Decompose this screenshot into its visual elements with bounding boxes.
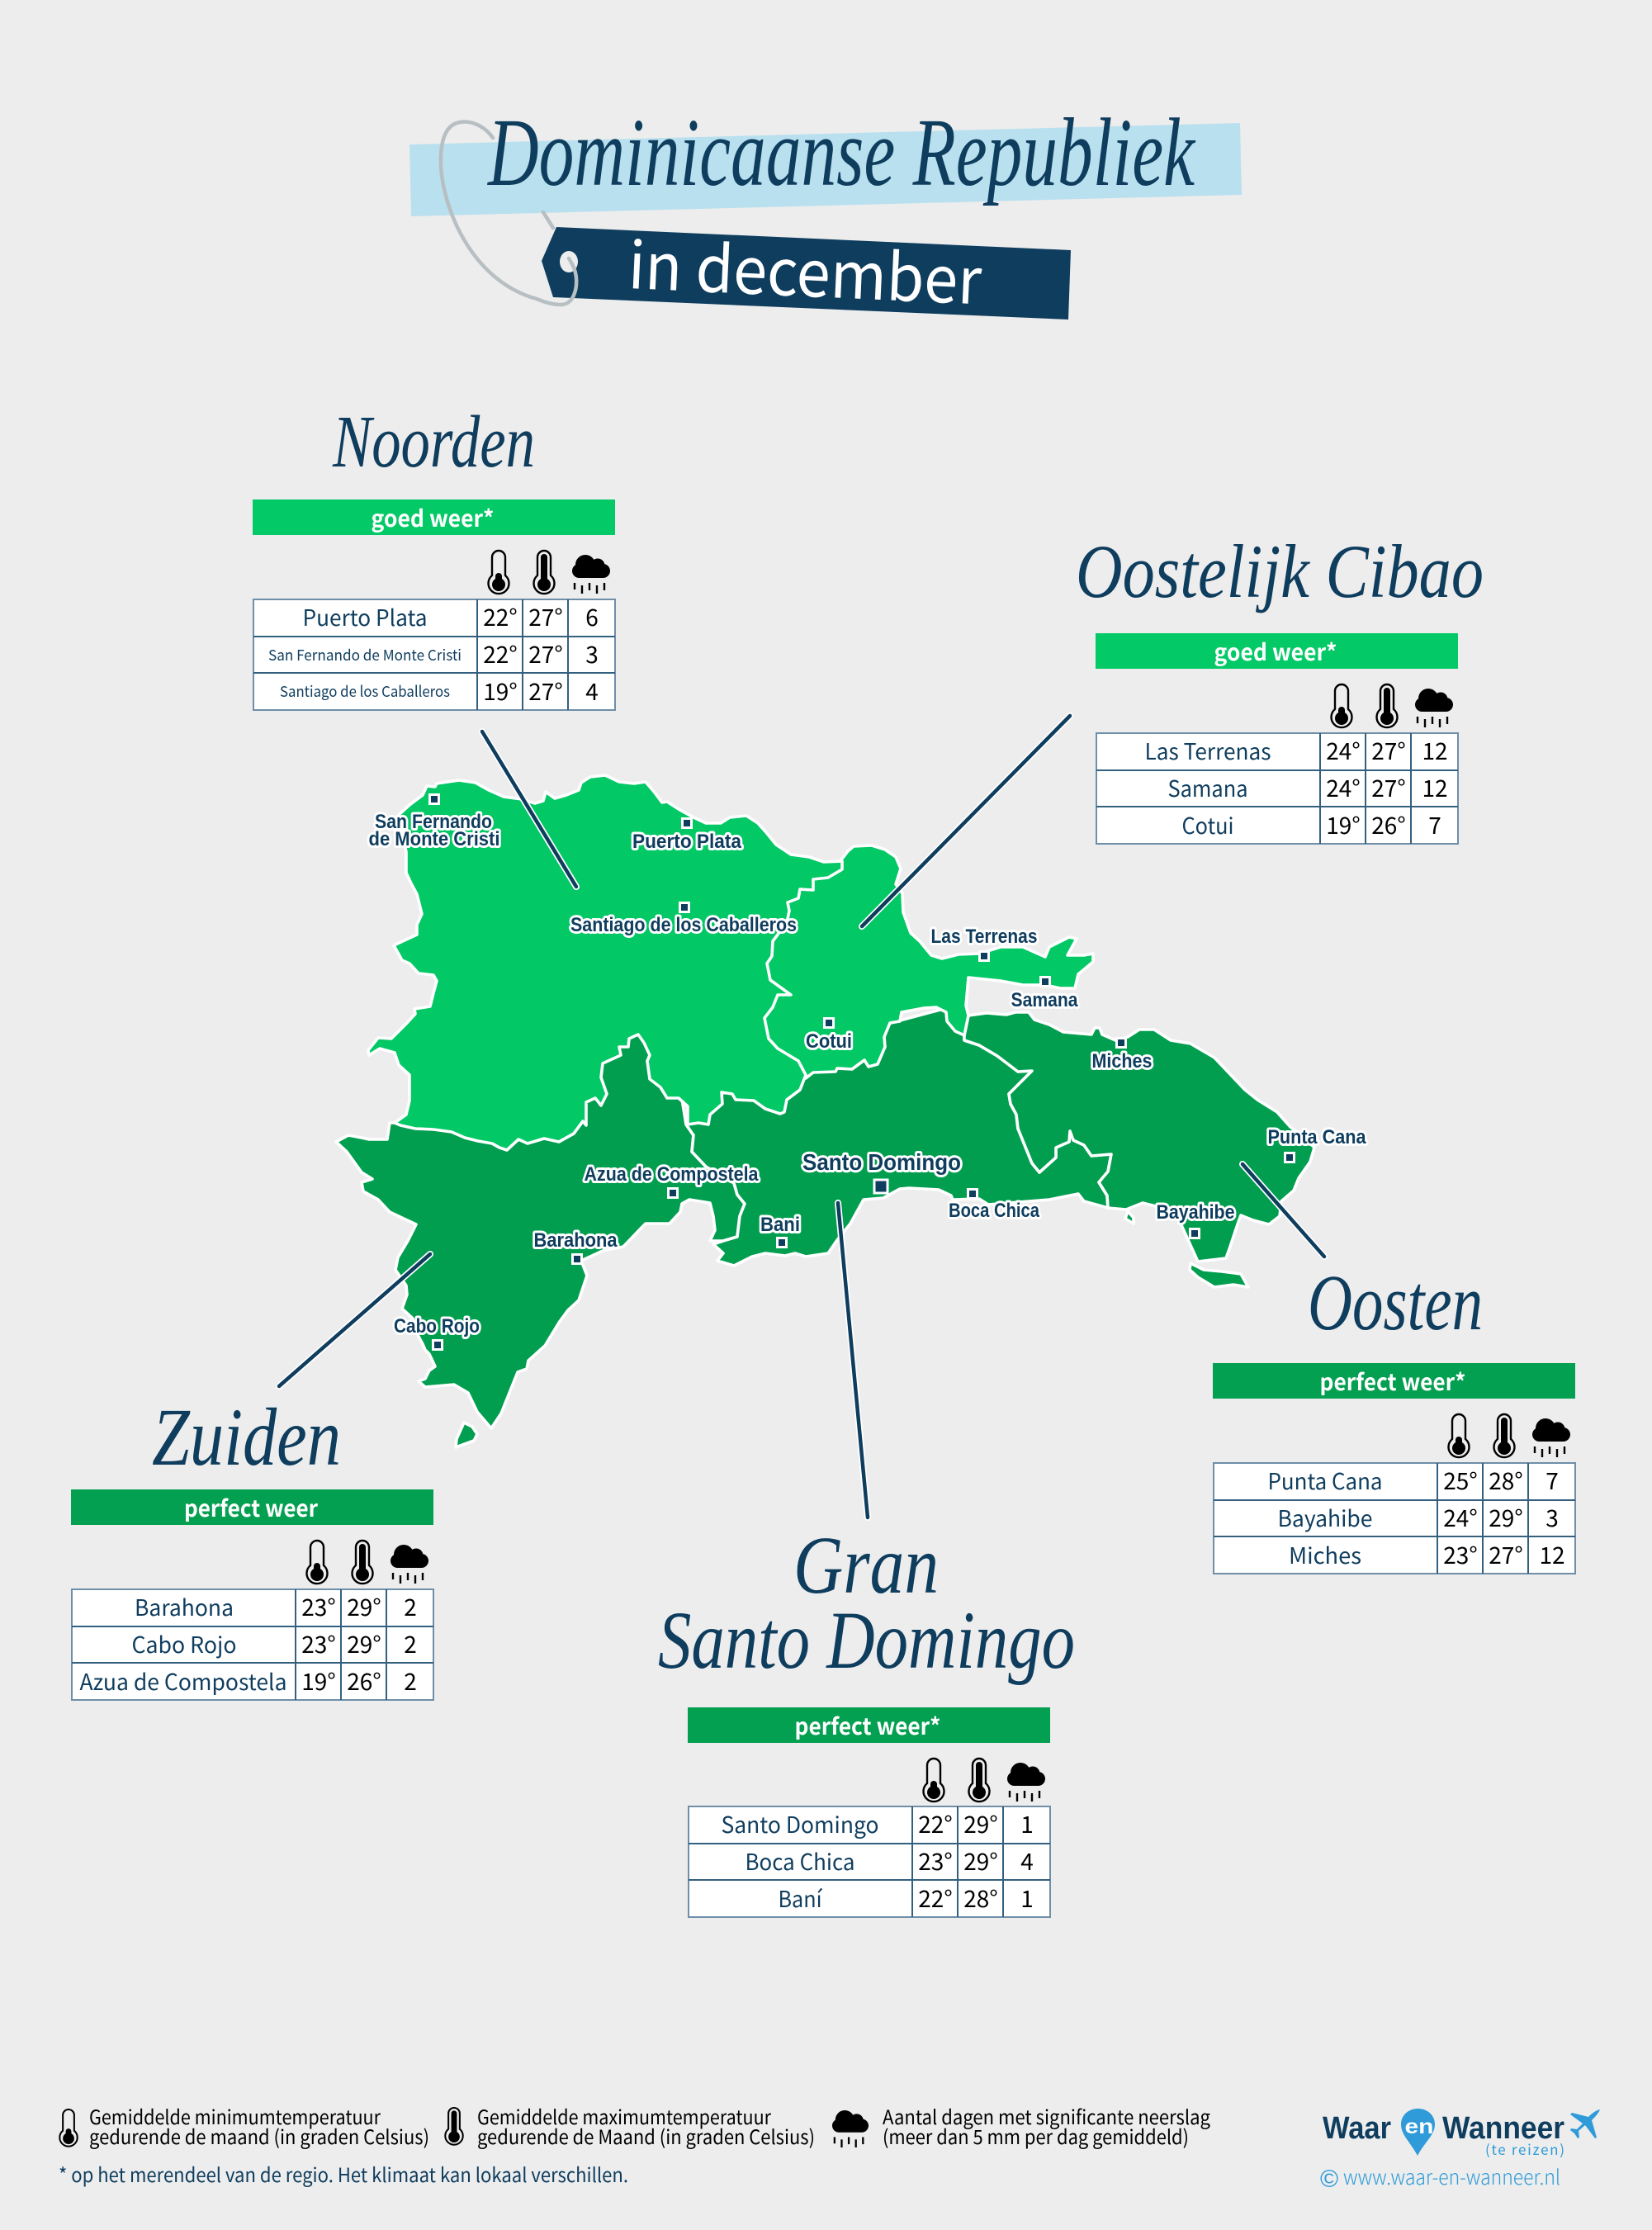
logo: Waar en Wanneer: Waar [1323,2111,1391,2146]
heading: Gran Santo Domingo [658,1519,1075,1686]
city labels: Punta Cana [1268,1126,1366,1148]
weather table: Barahona [135,1590,234,1622]
city labels: Puerto Plata [632,831,742,853]
leader: Oostelijk Cibao [862,716,1070,926]
panel: Noorden [253,401,615,710]
weather table: 2 [404,1590,417,1623]
weather table: 28° [963,1882,998,1915]
city labels: Santo Domingo [802,1149,961,1175]
panel body [688,1707,1050,1917]
weather table [689,1806,1050,1917]
weather table: 23° [918,1844,953,1877]
leader: Zuiden [279,1254,430,1386]
weather table: Boca Chica [745,1844,855,1877]
heading: Noorden: Noorden [332,401,535,483]
footnote: * op het merendeel van de regio. Het klimaat kan lokaal verschillen. [59,2159,628,2188]
heading: Gran Santo Domingo: Gran [793,1519,939,1611]
weather table: Las Terrenas [1144,734,1271,766]
title text: Dominicaanse Republiek [487,98,1196,206]
island: Saona [1190,1263,1248,1287]
leader: Noorden [482,731,576,887]
region: Zuiden [336,1024,745,1428]
status bar [253,500,615,535]
table icons [923,1759,1045,1802]
weather table: 22° [918,1807,953,1840]
weather table: 24° [1443,1501,1478,1534]
weather table: 29° [963,1844,998,1877]
weather table: 27° [1371,734,1406,767]
subtitle: in december [627,215,984,323]
legend: maximum temperature [445,2101,815,2150]
weather table: Santiago de los Caballeros [280,680,450,702]
legend: maximum temperature: gedurende de Maand (in graden Celsius) [477,2121,815,2150]
weather table [253,599,615,710]
legend: rainfall: (meer dan 5 mm per dag gemiddeld) [883,2121,1189,2150]
weather table: 19° [1326,808,1361,841]
weather table: Bayahibe [1278,1501,1372,1533]
leader: Gran Santo Domingo [838,1203,868,1517]
legend: maximum temperature: Gemiddelde maximumtemperatuur [477,2101,772,2130]
logo: Waar en Wanneer: (te reizen) [1485,2138,1564,2159]
city labels: Miches [1091,1050,1153,1072]
legend: minimum temperature: Gemiddelde minimumtemperatuur [89,2101,381,2130]
heading: Zuiden: Zuiden [152,1391,341,1483]
weather table: Punta Cana [1268,1464,1382,1496]
status bar: goed weer* [372,501,494,534]
weather table: Miches [1289,1538,1361,1570]
panel body [1213,1363,1575,1574]
weather table: 6 [585,600,599,633]
table icons [489,551,610,594]
weather table: 2 [404,1664,417,1697]
logo: Waar en Wanneer: en [1405,2115,1433,2138]
city labels: Samana [1011,989,1078,1011]
table icons [1448,1414,1570,1457]
logo: Waar en Wanneer: Wanneer [1442,2111,1564,2146]
weather table: 12 [1422,734,1448,767]
weather table: 29° [347,1627,381,1660]
status bar: goed weer* [1214,635,1337,668]
region: Oosten [964,1012,1314,1262]
city labels: Cotui [806,1030,852,1053]
weather table: 26° [347,1664,381,1697]
panel: Oostelijk Cibao [1076,529,1484,844]
weather table: Cotui [1182,808,1233,840]
weather table: 23° [301,1590,336,1623]
city labels: de Monte Cristi [368,828,500,850]
weather table: 19° [483,675,518,708]
weather table: 27° [528,637,563,670]
weather table: 27° [1371,771,1406,804]
weather table: Samana [1167,771,1248,803]
weather table: 24° [1326,734,1361,767]
region: Oostelijk Cibao [755,845,1093,1078]
weather table: 24° [1326,771,1361,804]
city labels: Cabo Rojo [394,1315,480,1338]
city labels: Santiago de los Caballeros [570,914,797,936]
legend: minimum temperature: gedurende de maand (in graden Celsius) [89,2121,429,2150]
weather table: 29° [1489,1501,1523,1534]
weather table: 12 [1422,771,1448,804]
weather table [72,1589,433,1700]
weather table: 4 [585,675,599,708]
weather table: 27° [528,675,563,708]
weather table [1214,1463,1575,1574]
weather table: 19° [301,1664,336,1697]
table icons [307,1541,428,1584]
city labels [368,811,1366,1338]
icon: map pin [1401,2109,1435,2156]
weather table [1096,733,1458,844]
legend: minimum temperature [59,2101,429,2150]
panel body [71,1489,433,1700]
island: Beata [456,1423,477,1447]
heading: Oostelijk Cibao: Oostelijk Cibao [1076,529,1484,613]
tag string [441,122,576,305]
city labels: Barahona [533,1229,618,1252]
city labels: Boca Chica [949,1200,1040,1222]
status bar: perfect weer [184,1491,319,1524]
weather table: 25° [1443,1464,1478,1497]
status bar [1213,1363,1575,1399]
weather table: 12 [1539,1538,1565,1571]
weather table: 1 [1020,1807,1034,1840]
panel: Gran Santo Domingo [658,1519,1075,1917]
island: Catalina [1125,1211,1134,1224]
status bar [688,1707,1050,1743]
weather table: San Fernando de Monte Cristi [268,644,462,665]
map [336,775,1314,1447]
status bar: perfect weer* [794,1709,941,1742]
weather table: 1 [1020,1882,1034,1915]
weather table: 28° [1489,1464,1523,1497]
website: © [1320,2166,1338,2193]
weather table: 22° [918,1882,953,1915]
weather table: 23° [301,1627,336,1660]
leader lines [279,716,1324,1517]
weather table: 2 [404,1627,417,1660]
title block [409,98,1242,323]
weather table: Cabo Rojo [132,1627,236,1659]
label: San Fernando de Monte Cristi: San Fernando [375,811,492,833]
title band [409,123,1242,216]
tag hole [560,251,578,272]
status bar [1096,633,1458,669]
website: www.waar-en-wanneer.nl [1343,2161,1560,2191]
region: Noorden [368,775,842,1150]
weather table: Puerto Plata [302,600,428,632]
weather table: 29° [347,1590,381,1623]
city labels: Azua de Compostela [585,1163,759,1186]
weather table: 4 [1020,1844,1034,1877]
weather table: 23° [1443,1538,1478,1571]
legend: rainfall [832,2101,1210,2150]
heading: Oosten: Oosten [1308,1258,1483,1347]
heading: Gran Santo Domingo: Santo Domingo [658,1594,1075,1686]
city markers [429,794,1295,1349]
weather table: 3 [1545,1501,1559,1534]
weather table: 29° [963,1807,998,1840]
title price tag [542,227,1071,320]
status bar: perfect weer* [1319,1365,1466,1398]
leader: Oosten [1243,1164,1324,1257]
weather table: 27° [528,600,563,633]
panel: Zuiden [71,1391,433,1700]
weather table: 26° [1371,808,1406,841]
logo: Waar en Wanneer [1320,2109,1600,2193]
legend [59,2101,1210,2188]
panel body [1096,633,1458,844]
weather table: Santo Domingo [722,1807,878,1839]
panel: Oosten [1213,1258,1575,1574]
weather table: Baní [778,1882,823,1914]
weather table: 22° [483,600,518,633]
icon: airplane [1570,2109,1600,2138]
region: Gran Santo Domingo [686,1007,1111,1266]
legend: rainfall: Aantal dagen met significante neerslag [883,2101,1210,2130]
weather table: 22° [483,637,518,670]
weather table: Azua de Compostela [79,1664,287,1697]
weather table: 3 [585,637,599,670]
city labels: Las Terrenas [931,926,1037,948]
city labels: Bani [760,1214,800,1236]
weather table: 7 [1428,808,1441,841]
status bar [71,1489,433,1525]
city labels: Bayahibe [1156,1201,1235,1224]
weather table: 7 [1545,1464,1559,1497]
weather table: 27° [1489,1538,1523,1571]
table icons [1331,684,1453,727]
